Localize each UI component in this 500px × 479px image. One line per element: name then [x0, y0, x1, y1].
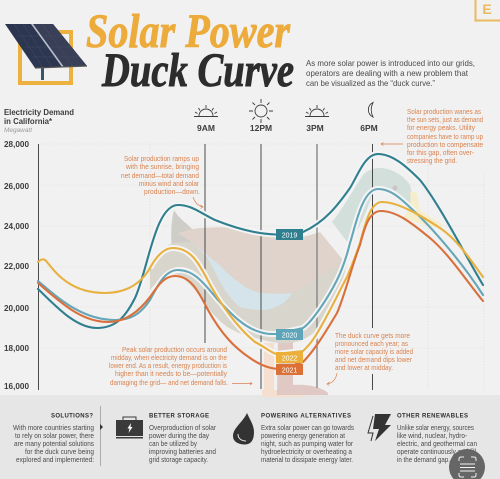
- y axis labels: [4, 139, 29, 391]
- callout: morning ramp: Solar production ramps up: [124, 154, 199, 163]
- callout: midday peak: damaging the grid— and net demand falls.: [110, 378, 228, 387]
- panel: other renewables: [397, 414, 477, 464]
- panel: powering alternatives: [261, 414, 354, 464]
- callout: morning ramp: production—down.: [144, 187, 200, 196]
- panel: solutions intro: explored and implemented:: [16, 455, 94, 464]
- y axis labels: 26,000: [4, 181, 29, 191]
- label: 2022: [276, 352, 303, 363]
- callout: deepening curve: The duck curve gets more: [335, 331, 410, 340]
- panel: powering alternatives: powering energy generation at: [261, 431, 345, 440]
- icon: sunrise 9AM: [194, 105, 218, 133]
- label: 2020: [276, 329, 303, 340]
- panel: other renewables: OTHER RENEWABLES: [397, 414, 468, 420]
- panel: powering alternatives: hydroelectricity or overheating a: [261, 447, 353, 456]
- panel: solutions band: [0, 395, 500, 479]
- line chart: net demand by year: [38, 154, 483, 369]
- panel: better storage: BETTER STORAGE: [149, 414, 209, 420]
- callout: midday peak: midday, when electricity demand is on the: [111, 353, 227, 362]
- callout: evening peak: for this gap, often over-: [407, 148, 474, 157]
- illustration: duck silhouette: [150, 168, 443, 395]
- callout: deepening curve: and net demand dips lower: [335, 355, 412, 364]
- label: 2022: 2022: [282, 356, 297, 362]
- callout: evening peak: companies have to ramp up: [407, 132, 483, 141]
- panel: better storage: can be utilized by: [149, 439, 197, 448]
- intro text: can be visualized as the “duck curve.”: [306, 78, 435, 88]
- series: 2022: [38, 202, 483, 354]
- chart heading: [4, 107, 74, 134]
- panel: powering alternatives: night, such as pumping water for: [261, 439, 353, 448]
- time markers: [194, 99, 378, 133]
- intro text: As more solar power is introduced into our grids,: [306, 58, 475, 68]
- callout: evening peak: production to compensate: [407, 140, 483, 149]
- callout: midday peak: [109, 345, 252, 387]
- intro text: operators are dealing with a new problem that: [306, 68, 469, 78]
- logo: E: [482, 1, 492, 17]
- panel: better storage: power during the day: [149, 431, 209, 440]
- panel: powering alternatives: POWERING ALTERNATIVES: [261, 414, 351, 420]
- icon: moon 6PM: 6PM: [360, 123, 378, 133]
- icon: scan button: [449, 449, 485, 479]
- y axis labels: 16,000: [4, 381, 29, 391]
- icon: sunset 3PM: 3PM: [306, 123, 324, 133]
- icon: sunrise 9AM: 9AM: [197, 123, 215, 133]
- panel: better storage: grid storage capacity.: [149, 455, 208, 464]
- icon: battery: [116, 417, 143, 438]
- callout: evening peak: [381, 107, 483, 165]
- y axis labels: 28,000: [4, 139, 29, 149]
- panel: other renewables: like wind, nuclear, hydro-: [397, 431, 467, 440]
- series: 2019: [38, 154, 483, 328]
- panel: solutions intro: are many potential solutions: [14, 439, 94, 448]
- callout: deepening curve: pronounced each year; as: [335, 339, 408, 348]
- icon: moon 6PM: [360, 102, 378, 133]
- panel: powering alternatives: material to dissipate energy later.: [261, 455, 353, 464]
- panel: better storage: improving batteries and: [149, 447, 216, 456]
- panel: better storage: [149, 414, 216, 464]
- series: 2020: [38, 189, 483, 334]
- callout: morning ramp: net demand—total demand: [121, 171, 199, 180]
- callout: evening peak: stressing the grid.: [407, 156, 457, 165]
- panel: solutions intro: With more countries starting: [13, 423, 94, 432]
- series: 2021: [38, 211, 483, 369]
- title: Duck Curve: [101, 44, 294, 97]
- panel: better storage: Overproduction of solar: [149, 423, 216, 432]
- panel: powering alternatives: Extra solar power can go towards: [261, 423, 354, 432]
- icon: sun 12PM: 12PM: [250, 123, 272, 133]
- callout: deepening curve: [327, 331, 413, 386]
- label: 2019: 2019: [282, 232, 297, 240]
- panel: solutions intro: to rely on solar power, there: [15, 431, 94, 440]
- chart heading: Electricity Demand: [4, 107, 74, 117]
- icon: sun 12PM: [249, 99, 273, 133]
- label: 2021: 2021: [282, 368, 297, 374]
- icon: lightning bolt: [368, 414, 391, 441]
- icon: solar panel: [5, 24, 87, 83]
- callout: evening peak: the sun sets, just as demand: [407, 115, 483, 124]
- chart heading: in California*: [4, 116, 53, 126]
- callout: deepening curve: and lower at midday.: [335, 363, 393, 372]
- title: Solar Power: [86, 5, 291, 58]
- intro text: [306, 58, 475, 88]
- icon: water drop: [233, 413, 254, 444]
- vertical time lines: [38, 144, 372, 390]
- y axis labels: 22,000: [4, 261, 29, 271]
- panel: solutions intro: SOLUTIONS?: [51, 414, 93, 420]
- logo: [476, 0, 500, 20]
- title: [86, 5, 294, 97]
- callout: morning ramp: minus wind and solar: [139, 179, 199, 188]
- panel: solutions intro: [13, 414, 94, 464]
- panel: other renewables: operate continuously and fill: [397, 447, 476, 456]
- callout: evening peak: for energy peaks. Utility: [407, 123, 475, 132]
- callout: morning ramp: with the sunrise, bringing: [125, 162, 199, 171]
- icon: sunset 3PM: [305, 105, 329, 133]
- panel: other renewables: Unlike solar energy, sources: [397, 423, 474, 432]
- y axis labels: 18,000: [4, 343, 29, 353]
- callout: evening peak: Solar production wanes as: [407, 107, 481, 116]
- y axis labels: 24,000: [4, 221, 29, 231]
- label: 2019: [276, 229, 303, 240]
- callout: deepening curve: more solar capacity is added: [335, 347, 413, 356]
- panel: other renewables: electric, and geothermal can: [397, 439, 477, 448]
- panel: solutions intro: for the duck curve being: [25, 447, 94, 456]
- y axis labels: 20,000: [4, 303, 29, 313]
- label: 2020: 2020: [282, 332, 297, 340]
- panel: other renewables: in the demand gap.: [397, 455, 450, 464]
- label: 2021: [276, 364, 303, 375]
- callout: midday peak: lower end. As a result, energy production is: [109, 361, 227, 370]
- callout: midday peak: higher than it needs to be—potentially: [115, 369, 227, 378]
- callout: morning ramp: [121, 154, 203, 208]
- callout: midday peak: Peak solar production occurs around: [122, 345, 227, 354]
- chart heading: Megawatt: [4, 127, 33, 134]
